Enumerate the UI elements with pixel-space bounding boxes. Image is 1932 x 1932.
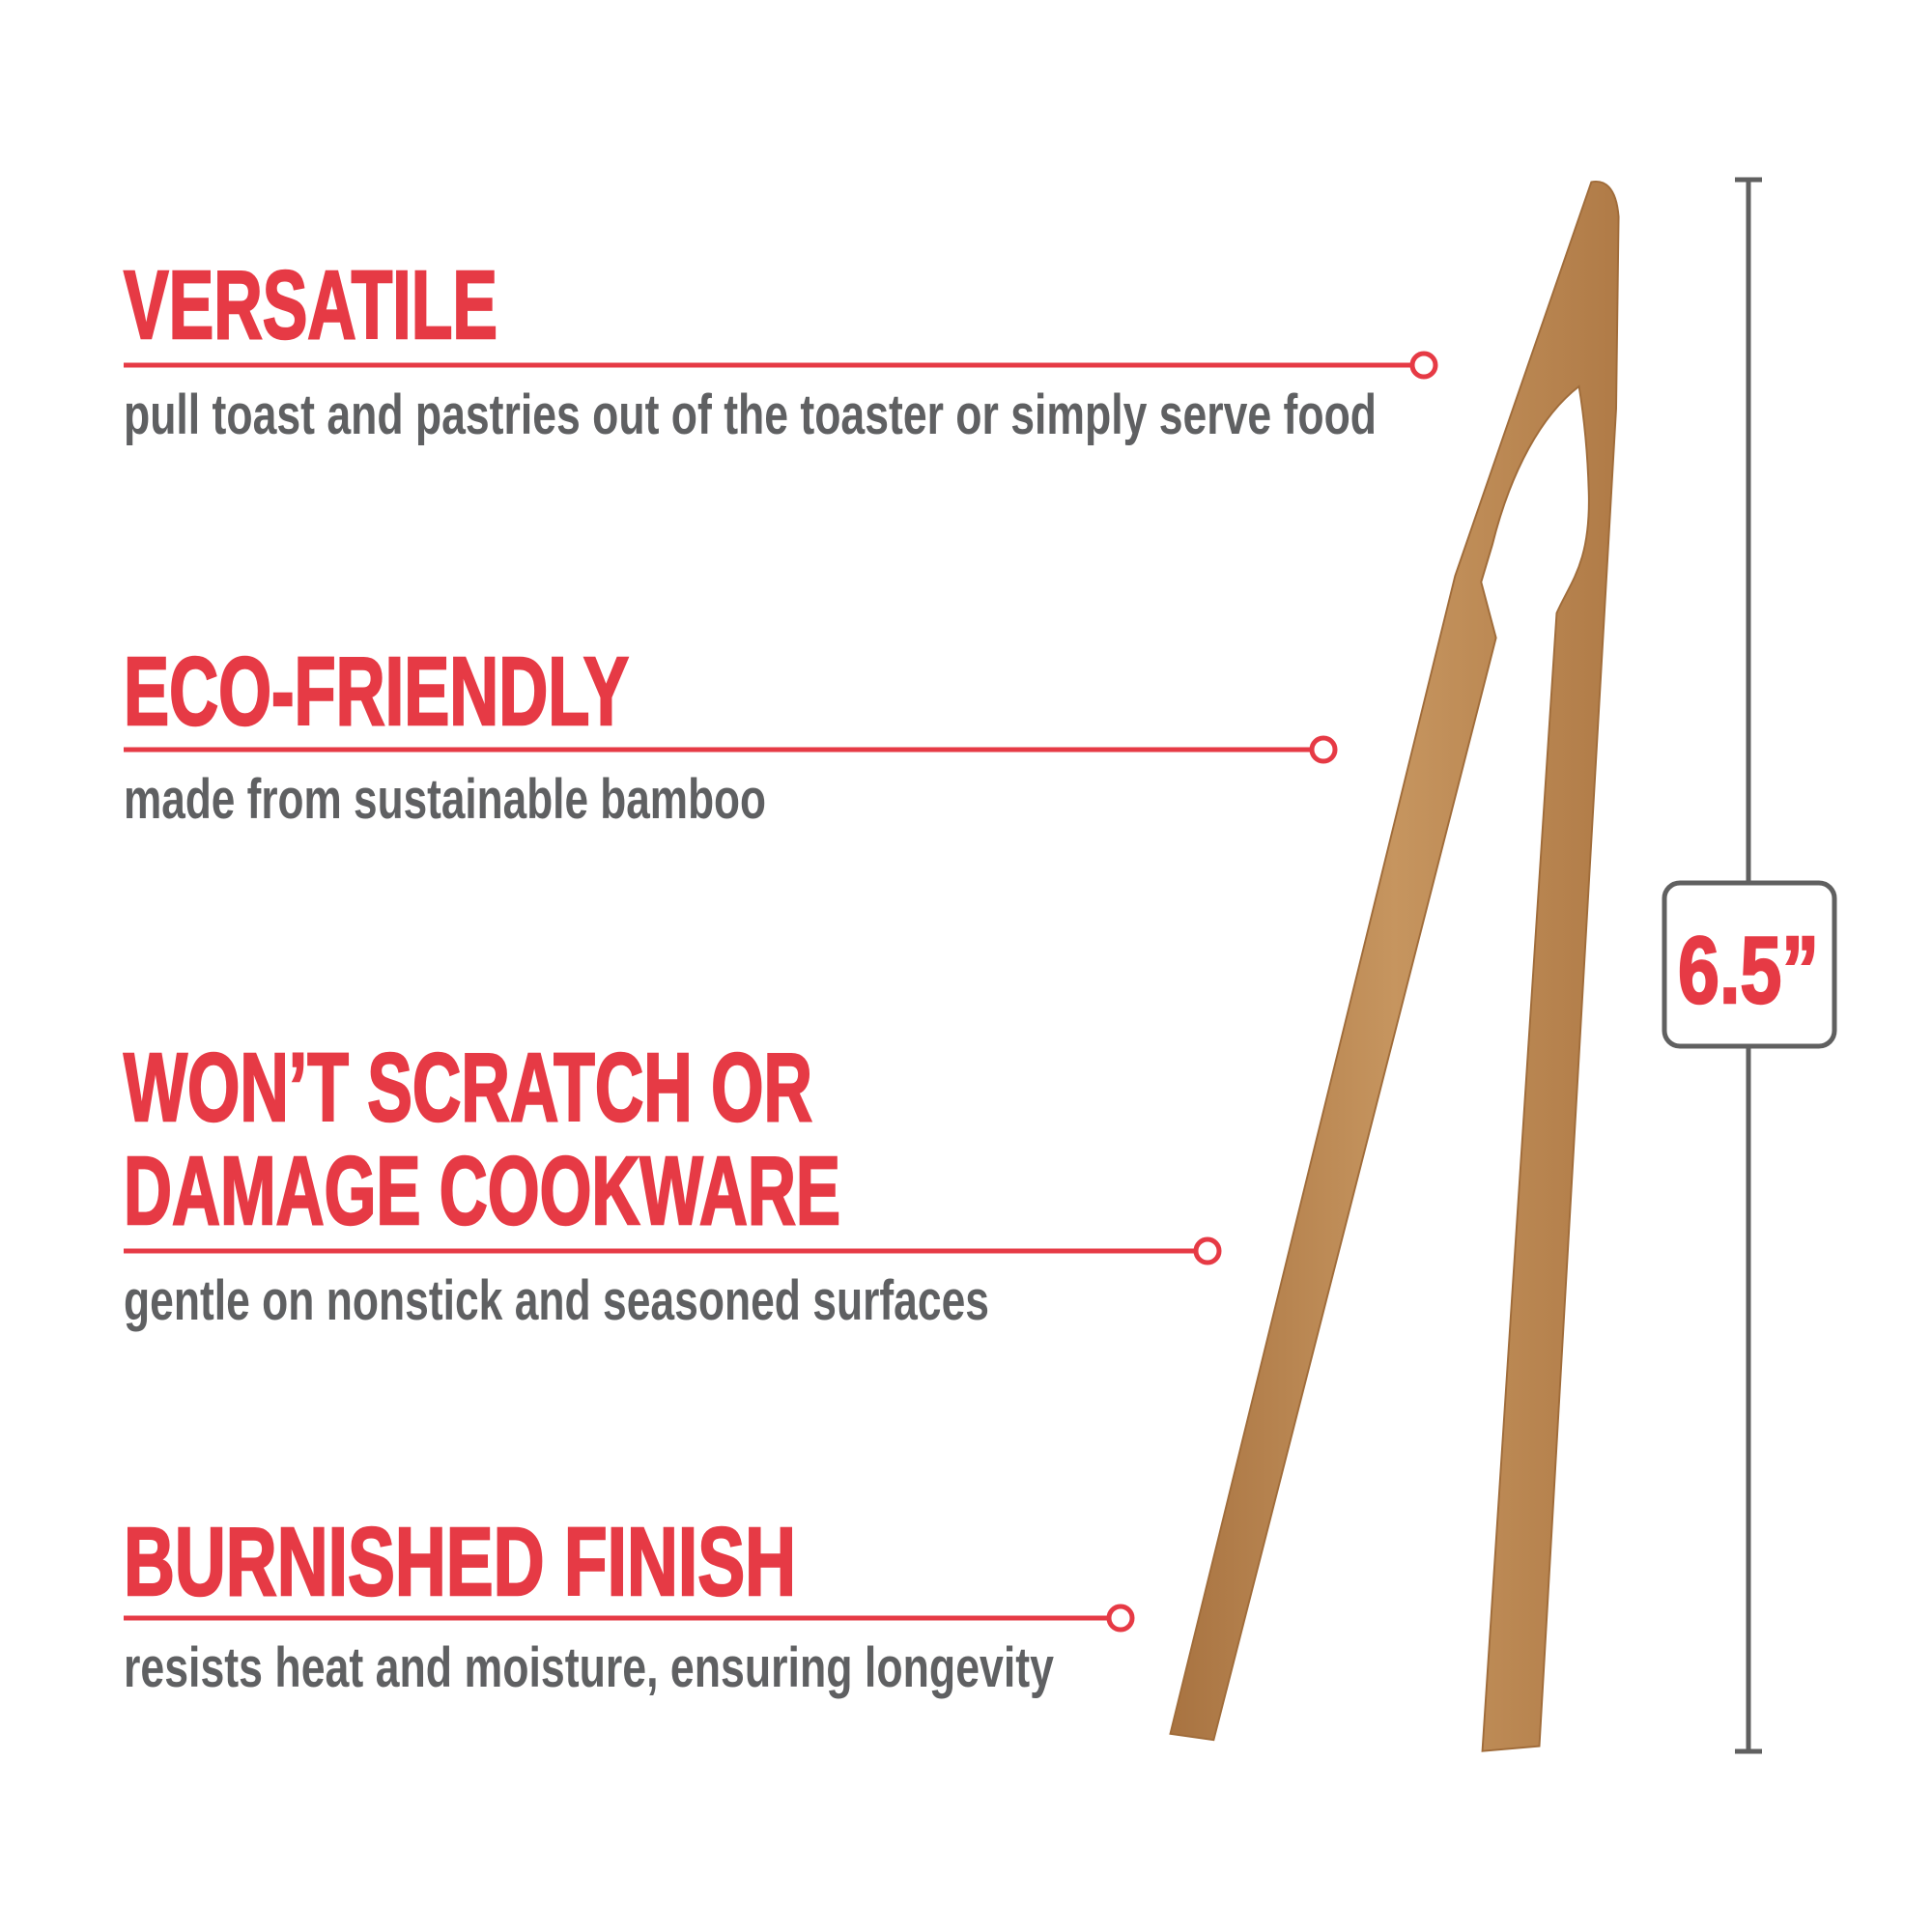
feature: burnished finish: resists heat and moisture, ensuring longevity bbox=[124, 1636, 1054, 1699]
feature: won't scratch: WON’T SCRATCH OR bbox=[124, 1034, 812, 1142]
feature: eco-friendly bbox=[124, 638, 1335, 831]
feature: won't scratch: DAMAGE COOKWARE bbox=[124, 1137, 840, 1245]
illustration: bamboo tongs bbox=[1170, 182, 1619, 1751]
dimension: 6.5 inch: 6.5” bbox=[1678, 917, 1819, 1023]
feature: burnished finish: BURNISHED FINISH bbox=[124, 1508, 796, 1616]
feature: won't scratch: gentle on nonstick and seasoned surfaces bbox=[124, 1269, 989, 1332]
feature: eco-friendly: ECO-FRIENDLY bbox=[124, 638, 629, 746]
feature: won't scratch bbox=[124, 1034, 1219, 1332]
feature: eco-friendly: made from sustainable bamboo bbox=[124, 768, 766, 831]
dimension: 6.5 inch bbox=[1664, 180, 1834, 1751]
feature: versatile bbox=[124, 251, 1435, 446]
feature: versatile: VERSATILE bbox=[124, 251, 497, 359]
feature: versatile: pull toast and pastries out of the toaster or simply serve food bbox=[124, 384, 1377, 446]
feature: burnished finish bbox=[124, 1508, 1132, 1699]
